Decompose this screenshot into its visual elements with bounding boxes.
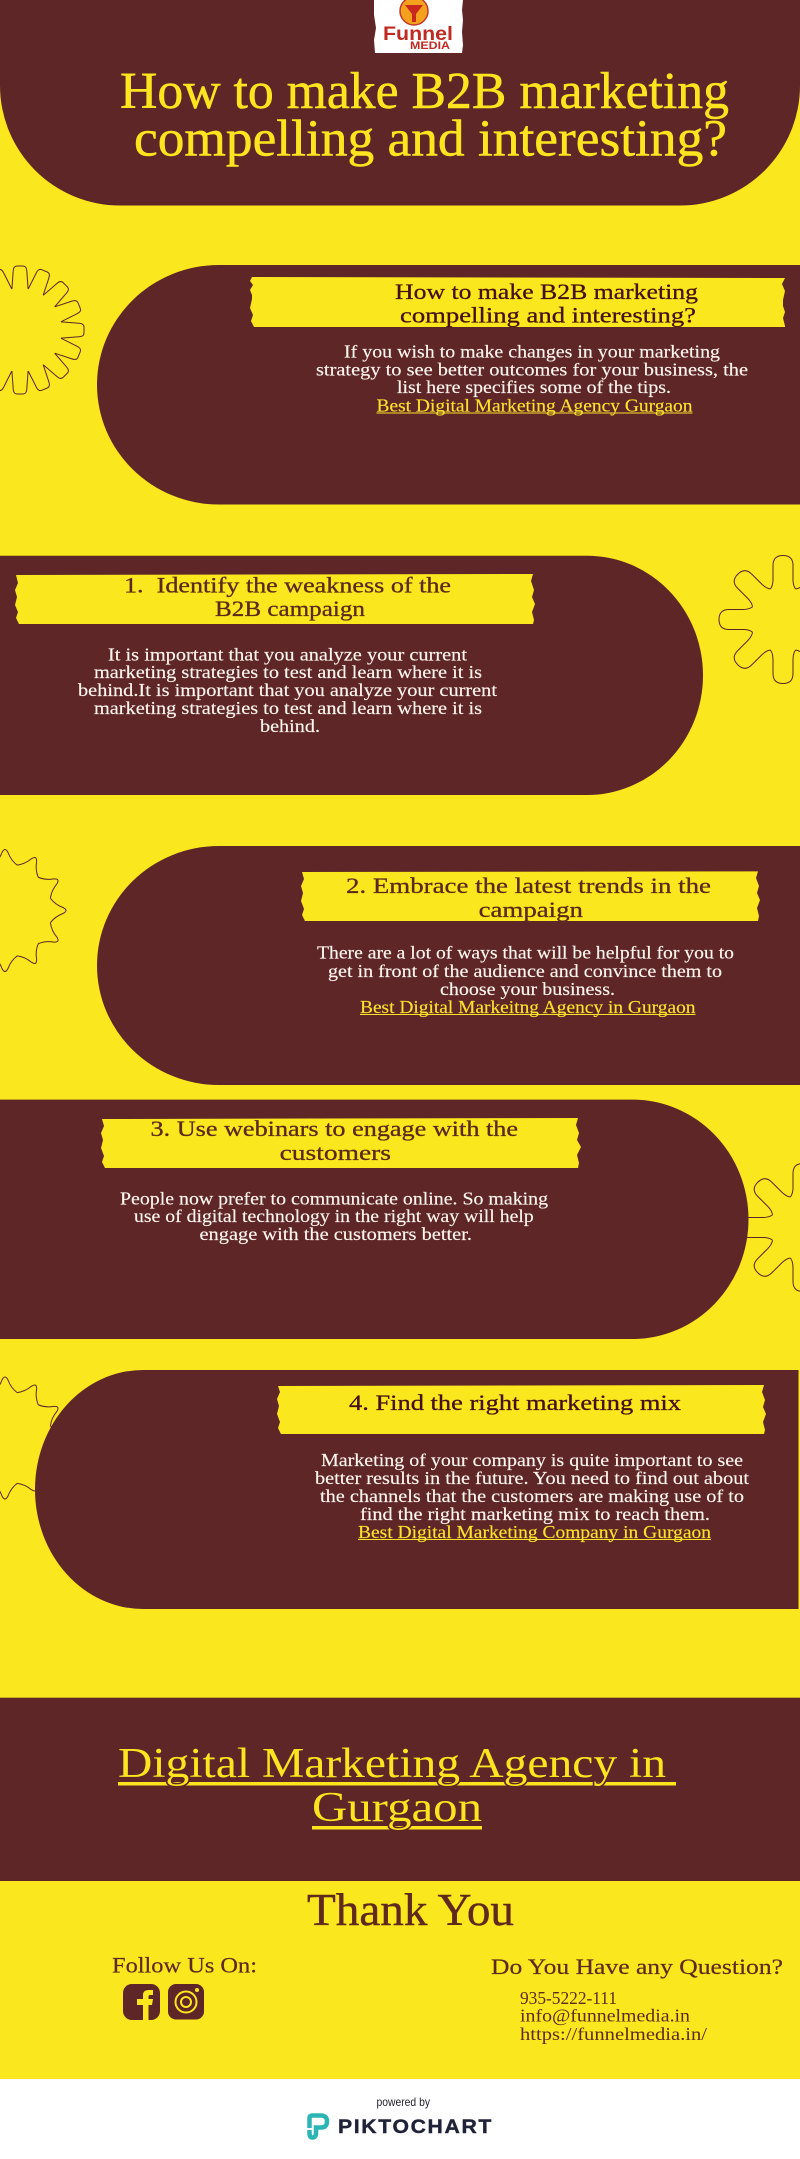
- heading: step 3: 3. Use webinars to engage with the: [150, 1116, 518, 1141]
- icon: instagram: [168, 1984, 204, 2020]
- heading: step 1: B2B campaign: [215, 596, 365, 621]
- heading: agency link: Gurgaon: [312, 1785, 482, 1831]
- text: step 4 body: Marketing of your company is quite important to see: [321, 1450, 743, 1470]
- heading: step 4: 4. Find the right marketing mix: [349, 1390, 681, 1415]
- text: step 1 body: behind.: [260, 716, 320, 736]
- heading: step 1: [124, 572, 451, 621]
- text: step 4 body: find the right marketing mix to reach them.: [360, 1504, 710, 1524]
- heading: step 1: 1. Identify the weakness of the: [124, 572, 451, 598]
- heading: step 2: 2. Embrace the latest trends in the: [346, 873, 711, 898]
- text: step 1 body: behind.It is important that you analyze your current: [78, 680, 497, 700]
- text: step 2 body: [317, 943, 734, 1017]
- text: piktochart wordmark: PIKTOCHART: [338, 2116, 493, 2138]
- heading: agency link: Digital Marketing Agency in: [118, 1741, 666, 1787]
- heading: step 2: campaign: [479, 897, 583, 922]
- decoration: flower outline left of intro: [0, 266, 84, 394]
- heading: step 3: customers: [280, 1140, 391, 1165]
- text: contact details: https://funnelmedia.in/: [520, 2024, 707, 2044]
- text: intro body: Best Digital Marketing Agency Gurgaon: [376, 396, 692, 416]
- text: step 4 body: the channels that the customers are making use of to: [320, 1486, 744, 1506]
- text: intro body: [316, 341, 748, 416]
- heading: step 2: [346, 873, 711, 922]
- panel: step 1: [0, 556, 703, 795]
- text: contact details: info@funnelmedia.in: [520, 2006, 690, 2026]
- text: intro body: list here specifies some of the tips.: [397, 377, 671, 397]
- decoration: rounded flower right of step 1: [719, 556, 800, 684]
- logo: Funnel Media: MEDIA: [410, 40, 450, 52]
- logo: Funnel Media: Funnel: [383, 24, 453, 45]
- panel: header: [0, 0, 800, 206]
- heading: intro: How to make B2B marketing: [395, 279, 698, 304]
- heading: thank you: Thank You: [307, 1885, 514, 1935]
- text: question heading: Do You Have any Question?: [491, 1954, 783, 1979]
- heading: intro: compelling and interesting?: [400, 303, 696, 328]
- tape: step 1 heading background: [15, 574, 535, 624]
- text: step 2 body: get in front of the audience and convince them to: [328, 961, 722, 981]
- heading: intro: [395, 279, 698, 328]
- tape: step 4 heading background: [277, 1385, 766, 1434]
- decoration: star outline left of step 4: [0, 1377, 66, 1499]
- text: contact details: [520, 1988, 707, 2044]
- text: step 1 body: marketing strategies to test and learn where it is: [94, 662, 482, 682]
- icon: piktochart mark: [310, 2116, 327, 2138]
- decoration: rounded flower right of step 3: [739, 1164, 800, 1292]
- panel: agency link band: [0, 1698, 800, 1881]
- decoration: star outline left of step 2: [0, 850, 66, 972]
- panel: step 4: [35, 1370, 798, 1609]
- tape: intro heading background: [250, 277, 785, 327]
- text: contact details: 935-5222-111: [520, 1988, 617, 2008]
- footer: piktochart: [0, 2079, 800, 2159]
- icon: facebook: [123, 1984, 160, 2020]
- title: compelling and interesting?: [134, 111, 727, 168]
- text: step 1 body: It is important that you analyze your current: [108, 644, 467, 664]
- title: How to make B2B marketing: [120, 63, 729, 120]
- text: step 2 body: Best Digital Markeitng Agency in Gurgaon: [360, 997, 696, 1017]
- text: intro body: strategy to see better outcomes for your business, the: [316, 359, 748, 379]
- text: step 4 body: [315, 1450, 749, 1542]
- panel: intro: [97, 265, 800, 504]
- title: [120, 63, 729, 168]
- text: powered by: powered by: [376, 2095, 430, 2109]
- heading: agency link: [118, 1741, 676, 1831]
- text: step 3 body: People now prefer to communicate online. So making: [120, 1188, 548, 1208]
- heading: step 3: [150, 1116, 518, 1165]
- logo: Funnel Media: [374, 0, 463, 53]
- text: step 2 body: choose your business.: [440, 979, 615, 999]
- panel: step 3: [0, 1100, 748, 1339]
- text: step 1 body: marketing strategies to test and learn where it is: [94, 698, 482, 718]
- text: step 3 body: engage with the customers better.: [200, 1224, 472, 1244]
- tape: step 2 heading background: [301, 871, 760, 921]
- text: intro body: If you wish to make changes in your marketing: [344, 341, 720, 361]
- panel: step 2: [97, 846, 800, 1085]
- tape: step 3 heading background: [101, 1118, 581, 1168]
- text: step 4 body: better results in the future. You need to find out about: [315, 1468, 749, 1488]
- text: step 3 body: use of digital technology in the right way will help: [134, 1206, 534, 1226]
- text: step 1 body: [78, 644, 497, 736]
- text: step 4 body: Best Digital Marketing Company in Gurgaon: [358, 1522, 711, 1542]
- text: follow us: Follow Us On:: [112, 1953, 257, 1978]
- text: step 3 body: [120, 1188, 548, 1244]
- text: step 2 body: There are a lot of ways that will be helpful for you to: [317, 943, 734, 963]
